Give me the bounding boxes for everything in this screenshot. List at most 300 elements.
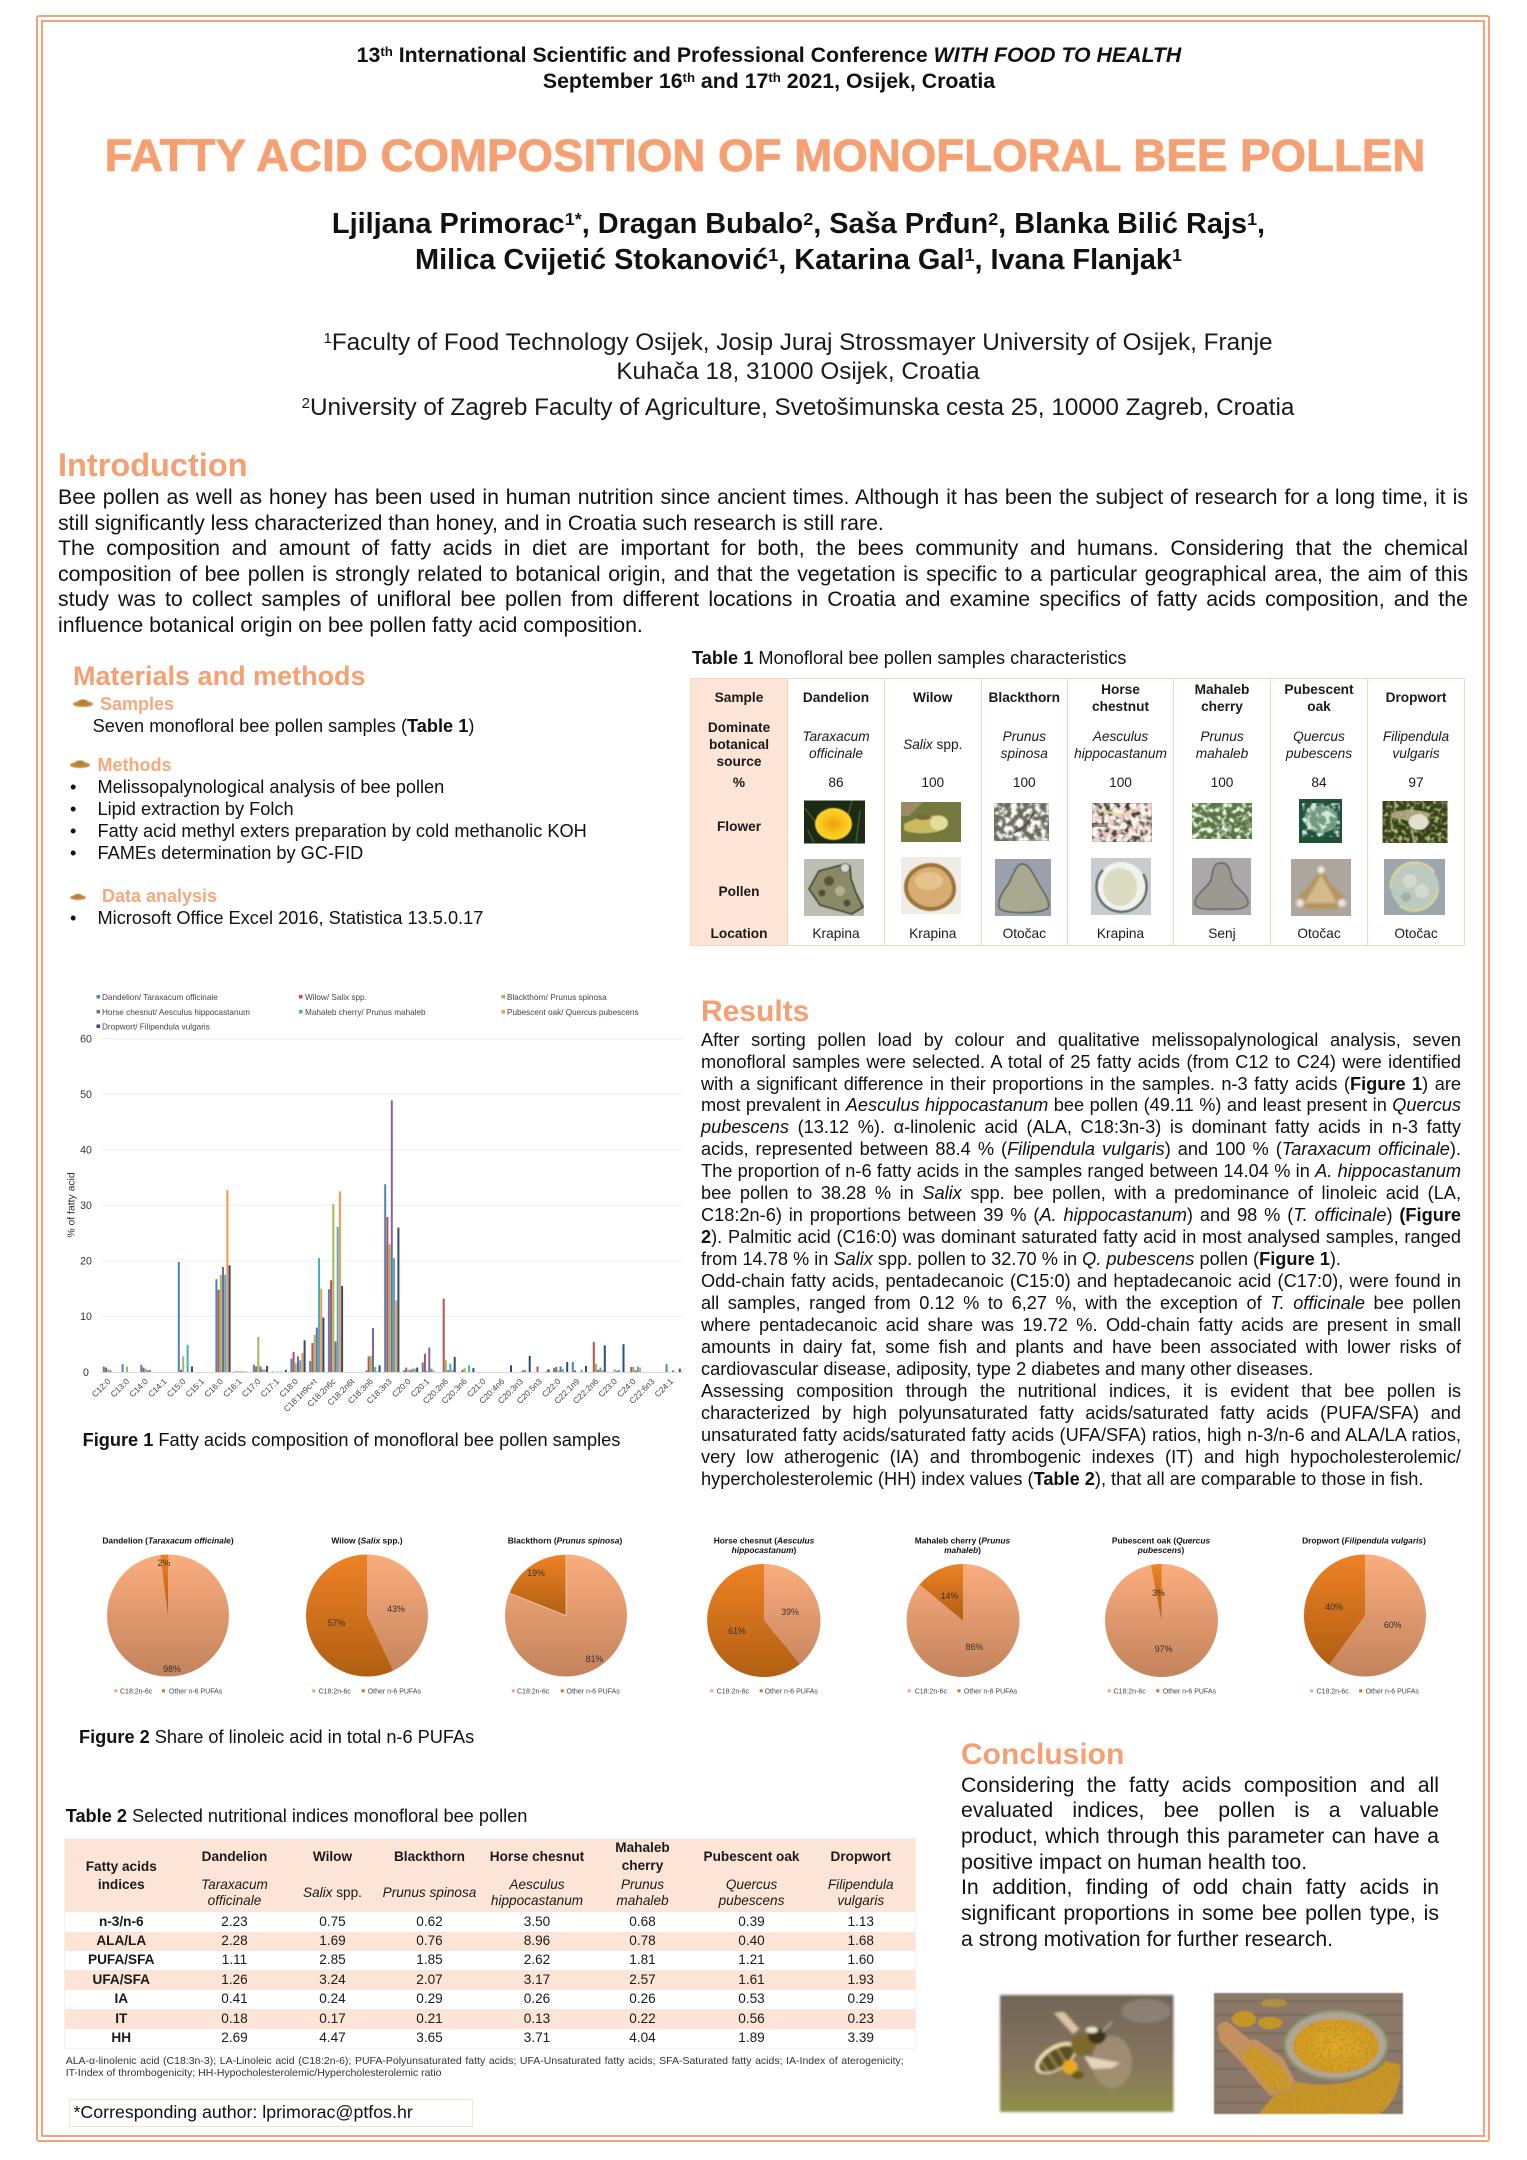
list: methods: Melissopalynological analysis of bee pollen [98,777,444,797]
table 1: samples characteristics: officinale [809,746,863,760]
pie: dropwort: 60% [1384,1620,1402,1630]
y axis labels: 50 [80,1089,92,1101]
table 1: samples characteristics: 100 [1013,775,1036,790]
table 2: nutritional indices: mahaleb [616,1893,669,1908]
table 2: nutritional indices: PUFA/SFA [88,1952,154,1967]
pollen: horse chestnut [1091,858,1151,915]
list: methods: Lipid extraction by Folch [98,799,294,819]
table 1: samples characteristics: Krapina [909,926,956,941]
text: introduction: composition of bee pollen is strongly related to botanical origin, and that the vegetation is specific to a particular geographical area, the aim of this [58,562,1468,586]
pie: pubescent oak: Other n-6 PUFAs [1163,1688,1216,1695]
table 2: nutritional indices: 0.75 [319,1914,346,1929]
glass bowl [1284,2010,1388,2080]
table 2: nutritional indices: 4.47 [319,2030,346,2045]
table 2: nutritional indices: Horse chesnut [490,1849,584,1864]
x axis category labels: C24:1 [652,1376,675,1399]
table 1: samples characteristics: Krapina [1097,926,1144,941]
table 2: nutritional indices: 2.57 [629,1972,656,1987]
table 1: samples characteristics: Salix spp. [903,737,962,752]
table 2: nutritional indices: cherry [622,1858,663,1873]
list: methods: • [70,777,76,797]
pie: dropwort: Dropwort (Filipendula vulgaris) [1302,1536,1426,1546]
table 2: nutritional indices: ALA/LA [96,1933,146,1948]
text: results: very low atherogenic (IA) and thrombogenic indexes (IT) and high hypocholesterolemic/ [701,1447,1461,1467]
chart legend: Blackthorn/ Prunus spinosa [507,993,607,1002]
x axis category labels: C18:1n9c+t [281,1376,319,1414]
table 2: nutritional indices: 1.81 [629,1952,656,1967]
pie: pubescent oak [1105,1536,1218,1695]
text: conclusion: evaluated indices, bee pollen is a valuable [961,1798,1439,1822]
heading: results: Results [701,995,809,1028]
table 2: nutritional indices: 1.69 [319,1933,346,1948]
table 1: samples characteristics: Pubescent [1284,682,1354,697]
text: conclusion: significant proportions in some bee pollen type, is [961,1901,1439,1925]
authors: Ljiljana Primorac1*, Dragan Bubalo2, Saša Prđun2, Blanka Bilić Rajs1, [332,208,1265,240]
table 1: samples characteristics: % [733,775,745,790]
table 1: samples characteristics: source [717,754,761,769]
table 2: nutritional indices: 0.53 [738,1991,765,2006]
table 1: samples characteristics: 97 [1408,775,1424,790]
chart legend: Mahaleb cherry/ Prunus mahaleb [305,1008,426,1017]
pie: wilow: C18:2n-6c [319,1688,351,1695]
x axis category labels: C22:1n9 [552,1376,582,1406]
x axis category labels: C18:0 [277,1376,300,1399]
table 1 caption: Table 1 Monofloral bee pollen samples characteristics [692,648,1126,668]
x axis category labels: C20:3n3 [496,1376,525,1406]
pollen: blackthorn [995,859,1051,916]
table 2: nutritional indices: 3.24 [319,1972,346,1987]
table 1: samples characteristics: Location [710,926,768,941]
bar chart: fatty acids composition [66,993,683,1414]
text: conclusion: product, which through this parameter can have a [961,1824,1439,1848]
heading: introduction: Introduction [58,447,248,483]
table 2: nutritional indices: 1.13 [848,1914,874,1929]
pie: dropwort [1302,1536,1426,1695]
pie: dandelion: Dandelion (Taraxacum officinale) [102,1536,234,1546]
table 2: nutritional indices: 0.24 [319,1991,346,2006]
table 2 caption: Table 2 Selected nutritional indices monofloral bee pollen [66,1806,527,1826]
table 2: nutritional indices: 2.07 [416,1972,443,1987]
table 2: nutritional indices [64,1838,916,2049]
flower: mahaleb cherry [1192,803,1252,839]
pie: pubescent oak: 97% [1155,1644,1173,1654]
text: results: Assessing composition through the nutritional indices, it is evident that bee pollen is [701,1381,1461,1401]
pie: dandelion: 2% [158,1558,171,1568]
x axis category labels: C13:0 [108,1376,131,1399]
flower: horse chestnut [1092,803,1152,842]
table 1: samples characteristics: cherry [1201,699,1243,714]
text: results: amounts in dairy fat, some fish and plants and have been associated with lower risks of [701,1337,1461,1357]
table 1: samples characteristics: Dandelion [803,690,869,705]
x axis category labels: C21:0 [465,1376,488,1399]
list: methods: Fatty acid methyl exters preparation by cold methanolic KOH [98,821,587,841]
table 1: samples characteristics: Otočac [1003,926,1046,941]
x axis category labels: C20:0 [390,1376,413,1399]
table 2: nutritional indices: 0.21 [416,2011,443,2026]
pollen: dandelion [804,859,864,916]
table 2: nutritional indices: 1.85 [416,1952,443,1967]
table 2: nutritional indices: 1.89 [738,2030,765,2045]
table 2: nutritional indices: 0.29 [416,1991,443,2006]
y axis labels [80,1034,92,1379]
x axis category labels: C18:3n6 [346,1376,375,1406]
text: results: pubescens (13.12 %). α-linolenic acid (ALA, C18:3n-3) is dominant fatty acids in n-3 fatty [701,1117,1461,1137]
text: results: characterized by high polyunsaturated fatty acids/saturated fatty acids (PUFA/SFA) and [701,1403,1461,1423]
table 1: samples characteristics: Filipendula [1383,729,1449,744]
pie: blackthorn: 19% [527,1568,545,1578]
x axis category labels: C22:0 [540,1376,563,1399]
table 2: nutritional indices: 0.40 [738,1933,765,1948]
pollen: pubescent oak [1291,859,1351,916]
table 2: nutritional indices: 0.26 [629,1991,656,2006]
table 2: nutritional indices: Pubescent oak [704,1849,799,1864]
table 2: nutritional indices: 2.28 [221,1933,248,1948]
table 2: nutritional indices: 2.69 [221,2030,248,2045]
table 1: samples characteristics: mahaleb [1196,746,1248,760]
table 2: nutritional indices: 0.68 [629,1914,656,1929]
affiliations [302,328,1294,421]
x axis category labels: C17:1 [258,1376,281,1399]
table 2: nutritional indices: 0.76 [416,1933,443,1948]
table 2: nutritional indices: indices [98,1877,145,1892]
chart legend [96,993,639,1031]
table 2: nutritional indices: Dropwort [831,1849,891,1864]
affiliations: 2University of Zagreb Faculty of Agriculture, Svetošimunska cesta 25, 10000 Zagreb, Croatia [302,394,1294,421]
x axis category labels: C22:2n6 [571,1376,600,1406]
x axis category labels: C20:5n3 [514,1376,544,1406]
text: conclusion: a strong motivation for further research. [961,1927,1333,1951]
text: conclusion [961,1773,1439,1951]
chart legend: Dropwort/ Filipendula vulgaris [102,1022,210,1031]
subheading: samples: Samples [100,694,174,714]
flower: dropwort [1382,801,1448,843]
table 2: nutritional indices: 3.39 [848,2030,874,2045]
conference header [357,42,1182,92]
figure 2 caption: Figure 2 Share of linoleic acid in total n-6 PUFAs [79,1727,474,1747]
title: FATTY ACID COMPOSITION OF MONOFLORAL BEE POLLEN [105,130,1425,181]
table 2: nutritional indices: officinale [208,1893,261,1908]
icon: pollen spoon, data analysis [70,894,86,900]
wooden scoop [1217,2022,1297,2096]
affiliations: 1Faculty of Food Technology Osijek, Josip Juraj Strossmayer University of Osijek, Franje [323,328,1273,356]
table 1: samples characteristics: 100 [1211,775,1233,790]
table 1: samples characteristics: Prunus [1003,729,1046,744]
pollen: mahaleb cherry [1192,858,1251,915]
photo: bee in flight [1000,1995,1174,2112]
heading: materials and methods: Materials and methods [73,661,366,691]
table 1: samples characteristics: Krapina [812,926,860,941]
x axis category labels: C15:0 [165,1376,188,1399]
flower: blackthorn [994,803,1049,841]
table 1: samples characteristics: vulgaris [1392,746,1440,760]
text: results: from 14.78 % in Salix spp. pollen to 32.70 % in Q. pubescens pollen (Figure 1). [701,1249,1341,1269]
table 1: samples characteristics: Horse [1101,682,1140,697]
table 2: nutritional indices: 0.78 [629,1933,656,1948]
table 1: samples characteristics: Sample [715,690,763,705]
y axis labels: 30 [80,1200,92,1212]
list: methods: • [70,799,76,819]
pie: mahaleb cherry: 14% [941,1591,959,1601]
table 2: nutritional indices: Dandelion [202,1849,267,1864]
table 2: nutritional indices: Taraxacum [201,1877,268,1892]
table 1: samples characteristics: 100 [1109,775,1132,790]
table 2: nutritional indices: 4.04 [629,2030,656,2045]
table 2: nutritional indices: 1.60 [848,1952,874,1967]
pie: dandelion: 98% [163,1664,181,1674]
pie: blackthorn: C18:2n-6c [517,1688,550,1695]
pie: mahaleb cherry: mahaleb) [944,1545,981,1555]
table 1: samples characteristics: Taraxacum [802,729,870,744]
text: results: most prevalent in Aesculus hippocastanum bee pollen (49.11 %) and least present in Quercus [701,1095,1461,1115]
text: results: After sorting pollen load by colour and qualitative melissopalynological analysis, seven [701,1030,1461,1050]
pie: dropwort: 40% [1325,1602,1343,1612]
table 1: samples characteristics: hippocastanum [1074,746,1167,760]
figure 1 caption: Figure 1 Fatty acids composition of monofloral bee pollen samples [83,1430,620,1450]
table 1: samples characteristics: 86 [828,775,844,790]
pie: mahaleb cherry: Mahaleb cherry (Prunus [915,1536,1011,1546]
table 2: nutritional indices: 2.85 [319,1952,346,1967]
table 1: samples characteristics: Blackthorn [988,690,1060,705]
table 2 abbreviations note: ALA-α-linolenic acid (C18:3n-3); LA-Linoleic acid (C18:2n-6); PUFA-Polyunsaturated fatty acids; UFA-Unsaturated fatty acids; SFA-Saturated fatty acids; IA-Index of aterogenicity; [66,2055,904,2067]
chart legend: Pubescent oak/ Quercus pubescens [507,1008,639,1017]
pie: horse chesnut: C18:2n-6c [717,1688,749,1695]
table 2: nutritional indices: 8.96 [524,1933,550,1948]
subheading: methods: Methods [98,755,172,775]
icon: pollen spoon, samples [73,699,93,707]
pie: wilow: 57% [328,1618,345,1628]
table 2: nutritional indices: Mahaleb [615,1840,670,1855]
text: conclusion: positive impact on human health too. [961,1850,1307,1874]
table 2: nutritional indices: pubescens [719,1893,784,1908]
subheading: data analysis: Data analysis [102,886,217,906]
text: results: The proportion of n-6 fatty acids in the samples ranged between 14.04 % in A. hippocastanum [701,1161,1461,1181]
list: methods: FAMEs determination by GC-FID [98,843,363,863]
x axis category labels [90,1376,675,1414]
x axis category labels: C20:2n6 [421,1376,450,1406]
pie: mahaleb cherry [906,1536,1020,1695]
table 2: nutritional indices: Aesculus [509,1877,565,1892]
table 1: samples characteristics: Mahaleb [1195,682,1249,697]
flower: pubescent oak [1299,799,1342,843]
corresponding author box: *Corresponding author: lprimorac@ptfos.hr [74,2102,413,2122]
table 2: nutritional indices: UFA/SFA [93,1972,150,1987]
table 2: nutritional indices: 0.23 [848,2011,874,2026]
text: introduction: Bee pollen as well as honey has been used in human nutrition since ancient times. Although it has been the subject of research for a long time, it is [58,485,1468,509]
table 2: nutritional indices: 0.13 [524,2011,550,2026]
pie: dandelion: Other n-6 PUFAs [169,1688,223,1695]
table 1: samples characteristics: Prunus [1200,729,1244,744]
table 1: samples characteristics: Dominate [708,720,770,735]
x axis category labels: C15:1 [183,1376,206,1399]
table 2: nutritional indices: 0.29 [848,1991,874,2006]
pie: horse chesnut: Other n-6 PUFAs [765,1688,818,1695]
x axis category labels: C18:2n6t [325,1376,357,1407]
conference header: 13th International Scientific and Professional Conference WITH FOOD TO HEALTH [357,42,1181,66]
x axis category labels: C20:3n6 [439,1376,469,1406]
x axis category labels: C16:1 [221,1376,244,1399]
table 2: nutritional indices: 3.50 [524,1914,550,1929]
table 1: samples characteristics: Aesculus [1093,729,1148,744]
table 2: nutritional indices: Prunus spinosa [383,1885,476,1900]
pie: dandelion [102,1536,234,1695]
table 2: nutritional indices: Salix spp. [303,1885,362,1900]
table 1: samples characteristics: Otočac [1394,926,1438,941]
text: results: where pentadecanoic acid share was 19.72 %. Odd-chain fatty acids are present in small [701,1315,1461,1335]
x axis category labels: C24:0 [615,1376,638,1399]
table 2: nutritional indices: 0.56 [738,2011,765,2026]
authors [332,208,1265,276]
pollen: dropwort [1384,859,1445,915]
table 2: nutritional indices: IA [114,1991,128,2006]
table 2: nutritional indices: 0.22 [629,2011,656,2026]
table 2: nutritional indices: Prunus [621,1877,664,1892]
corresponding author box [68,2099,472,2127]
table 1: samples characteristics [690,678,1465,946]
pie: blackthorn [505,1536,627,1695]
table 2: nutritional indices: 2.23 [221,1914,248,1929]
text: results: with a significant difference in their proportions in the samples. n-3 fatty acids (Figure 1) are [701,1074,1461,1094]
text: introduction: influence botanical origin on bee pollen fatty acid composition. [58,613,643,637]
table 1: samples characteristics: Otočac [1297,926,1341,941]
x axis category labels: C12:0 [90,1376,113,1399]
table 1: samples characteristics: chestnut [1092,699,1149,714]
x axis category labels: C22:6n3 [627,1376,657,1406]
list: methods [70,777,587,863]
x axis category labels: C20:1 [408,1376,432,1399]
table 2: nutritional indices: 3.65 [416,2030,443,2045]
table 2: nutritional indices: HH [111,2030,131,2045]
table 2: nutritional indices: Quercus [726,1877,777,1892]
table 2: nutritional indices: 1.21 [738,1952,765,1967]
list: methods: • [70,843,76,863]
x axis category labels: C14:0 [127,1376,150,1399]
text: results: hypercholesterolemic (HH) index values (Table 2), that all are comparable to those in fish. [701,1469,1423,1489]
pie: blackthorn: 81% [586,1654,603,1664]
pie: mahaleb cherry: C18:2n-6c [915,1688,947,1695]
text: results: monofloral samples were selected. A total of 25 fatty acids (from C12 to C24) were identified [701,1052,1461,1072]
x axis category labels: C16:0 [202,1376,225,1399]
text: results: unsaturated fatty acids/saturated fatty acids (UFA/SFA) ratios, high n-3/n-6 and ALA/LA ratios, [701,1425,1461,1445]
list: methods: • [70,821,76,841]
table 2: nutritional indices: vulgaris [837,1893,884,1908]
pie: horse chesnut: 61% [728,1626,746,1636]
x axis category labels: C17:0 [240,1376,263,1399]
photo: bee pollen in bowl and scoop [1214,1993,1403,2114]
text: results: bee pollen to 38.28 % in Salix spp. bee pollen, with a predominance of linoleic acid (LA, [701,1183,1461,1203]
table 1: samples characteristics: 84 [1311,775,1327,790]
table 1: samples characteristics: Flower [717,819,761,834]
text: results [700,1030,1462,1489]
x axis category labels: C20:4n6 [477,1376,507,1406]
text: results: acids, represented between 88.4 % (Filipendula vulgaris) and 100 % (Taraxacum officinale). [701,1139,1461,1159]
y axis title: % of fatty acid [66,1172,78,1238]
text: results: 2). Palmitic acid (C16:0) was dominant saturated fatty acid in most analysed samples, ranged [701,1227,1461,1247]
pie: wilow [306,1536,428,1695]
table 2: nutritional indices: 0.26 [524,1991,550,2006]
conference header: September 16th and 17th 2021, Osijek, Croatia [543,68,995,92]
table 1: samples characteristics: spinosa [1001,746,1048,760]
chart legend: Horse chesnut/ Aesculus hippocastanum [102,1008,250,1017]
text: conclusion: Considering the fatty acids composition and all [961,1773,1439,1797]
pie: pubescent oak: C18:2n-6c [1114,1688,1146,1695]
pie: horse chesnut: hippocastanum) [732,1545,797,1555]
pie: dropwort: C18:2n-6c [1316,1688,1349,1695]
affiliations: Kuhača 18, 31000 Osijek, Croatia [616,358,980,385]
table 1: samples characteristics: Wilow [913,690,952,705]
table 2: nutritional indices: 1.68 [848,1933,874,1948]
pie: wilow: Wilow (Salix spp.) [331,1536,403,1546]
table 1: samples characteristics: 100 [921,775,944,790]
y axis labels: 40 [80,1144,92,1156]
table 2: nutritional indices: 1.26 [221,1972,248,1987]
text: conclusion: In addition, finding of odd chain fatty acids in [961,1875,1439,1899]
text: introduction: The composition and amount of fatty acids in diet are important for both, the bees community and humans. Considering that the chemical [58,536,1468,560]
chart legend: Dandelion/ Taraxacum officinale [102,993,218,1002]
scattered pollen [1259,2061,1400,2114]
table 1: samples characteristics: oak [1307,699,1331,714]
table 1: samples characteristics: Pollen [718,884,760,899]
table 1: samples characteristics: Senj [1208,926,1236,941]
text: samples: Seven monofloral bee pollen samples (Table 1) [93,716,474,736]
y axis labels: 0 [83,1367,89,1379]
table 2: nutritional indices: 0.39 [738,1914,765,1929]
table 2 abbreviations note: IT-Index of thrombogenicity; HH-Hypocholesterolemic/Hypercholesterolemic ratio [66,2067,442,2079]
flower: willow [901,802,961,842]
text: results: Odd-chain fatty acids, pentadecanoic (C15:0) and heptadecanoic acid (C17:0), were found in [701,1271,1461,1291]
pie: horse chesnut [707,1536,820,1695]
table 2: nutritional indices: 1.11 [222,1952,247,1967]
list: data analysis: • [70,908,76,928]
x axis category labels: C14:1 [146,1376,169,1399]
pie: blackthorn: Other n-6 PUFAs [566,1688,620,1695]
table 2: nutritional indices: 3.71 [524,2030,550,2045]
table 2: nutritional indices: n-3/n-6 [99,1914,144,1929]
table 2: nutritional indices: hippocastanum [491,1893,583,1908]
text: results: all samples, ranged from 0.12 % to 6,27 %, with the exception of T. officinale bee pollen [701,1293,1461,1313]
x axis category labels: C23:0 [596,1376,619,1399]
table 1: samples characteristics: Dropwort [1386,690,1446,705]
text: introduction: still significantly less characterized than honey, and in Croatia such research is still rare. [58,511,884,535]
pie: pubescent oak: Pubescent oak (Quercus [1112,1536,1210,1546]
pie: pubescent oak: 3% [1152,1588,1165,1598]
text: introduction: study was to collect samples of unifloral bee pollen from different locations in Croatia and examine specifics of fatty acids composition, and the [58,587,1468,611]
pollen: willow [901,857,961,914]
heading: conclusion: Conclusion [961,1738,1124,1771]
x axis category labels: C18:2n6c [305,1376,338,1409]
pie: horse chesnut: Horse chesnut (Aesculus [714,1536,815,1546]
table 2 abbreviations note [66,2055,904,2079]
table 2: nutritional indices: 1.61 [738,1972,765,1987]
pie: wilow: 43% [387,1604,405,1614]
flower: dandelion [804,800,865,844]
y axis labels: 20 [80,1256,92,1268]
pie: horse chesnut: 39% [781,1607,799,1617]
x axis category labels: C18:3n3 [364,1376,394,1406]
table 2: nutritional indices: 0.62 [416,1914,443,1929]
table 2: nutritional indices: 0.17 [319,2011,346,2026]
table 2: nutritional indices: Blackthorn [394,1849,465,1864]
pie: dropwort: Other n-6 PUFAs [1366,1688,1419,1695]
table 1: samples characteristics: Quercus [1293,729,1345,744]
table 1: samples characteristics: botanical [709,737,769,752]
table 1: samples characteristics: pubescens [1286,746,1352,760]
pie: dandelion: C18:2n-6c [120,1688,153,1695]
pie: mahaleb cherry: Other n-6 PUFAs [964,1688,1018,1695]
y axis labels: 10 [80,1311,92,1323]
authors: Milica Cvijetić Stokanović1, Katarina Gal1, Ivana Flanjak1 [415,244,1182,276]
pie: mahaleb cherry: 86% [966,1642,983,1652]
table 2: nutritional indices: 3.17 [524,1972,550,1987]
